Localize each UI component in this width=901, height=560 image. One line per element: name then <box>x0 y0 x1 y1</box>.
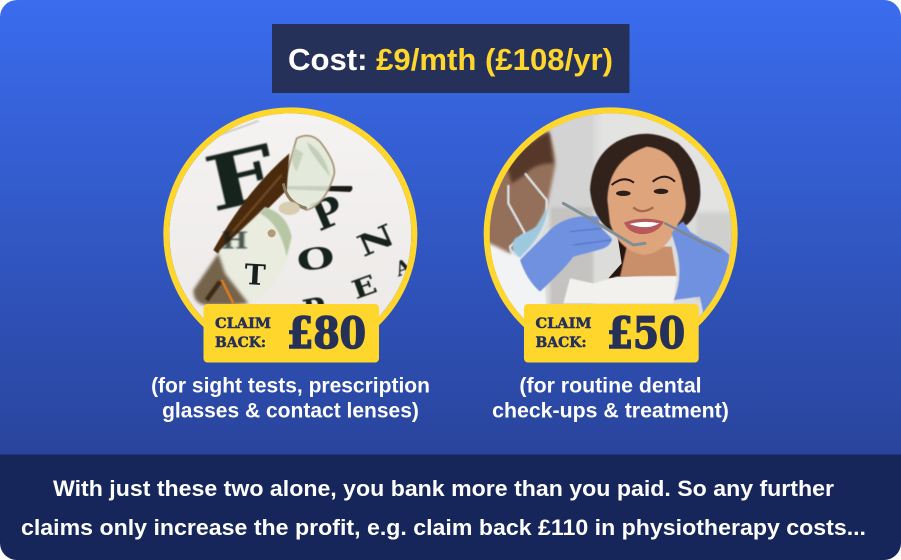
photo: glasses on eye chart: P <box>300 291 329 330</box>
claim badge £50 <box>524 304 699 362</box>
face <box>607 147 686 255</box>
claim badge £50: BACK: <box>536 335 586 351</box>
photo: glasses on eye chart: A <box>391 253 415 282</box>
photo: dentist and patient <box>484 107 738 327</box>
photo: glasses on eye chart: O <box>294 239 337 279</box>
temple arm <box>213 153 289 257</box>
patient hair <box>590 134 700 233</box>
cost heading <box>272 24 630 93</box>
claim badge £80: £80 <box>287 309 366 359</box>
bottom summary bar: With just these two alone, you bank more than you paid. So any further <box>53 476 834 501</box>
claim badge £80: CLAIM <box>215 316 271 332</box>
photo: glasses on eye chart: H <box>222 228 248 255</box>
optical caption: glasses & contact lenses) <box>162 400 419 422</box>
claim badge £50: CLAIM <box>536 316 592 332</box>
optical caption: (for sight tests, prescription <box>151 374 430 398</box>
panel: dental claim <box>483 110 740 422</box>
neck and chest <box>620 247 677 277</box>
dental caption: check-ups & treatment) <box>492 398 729 422</box>
bib <box>563 276 677 303</box>
bottom summary bar <box>0 454 901 560</box>
cost heading: Cost: £9/mth (£108/yr) <box>288 42 613 77</box>
photo: glasses on eye chart: N <box>352 218 400 264</box>
dental caption: (for routine dental <box>519 374 702 398</box>
claim badge £50: £50 <box>607 309 685 359</box>
bottom summary bar: claims only increase the profit, e.g. claim back £110 in physiotherapy costs... <box>21 515 866 540</box>
dentist glove <box>520 216 612 292</box>
left lens <box>215 207 292 303</box>
photo: glasses on eye chart: P <box>305 187 350 241</box>
photo: glasses on eye chart: F <box>198 129 284 229</box>
photo: glasses on eye chart: T <box>244 257 266 292</box>
right lens <box>285 136 334 210</box>
patient-side glove <box>672 222 729 313</box>
photo: glasses on eye chart: E <box>348 269 381 305</box>
dentist head <box>483 132 555 253</box>
photo: glasses on eye chart <box>163 107 418 327</box>
claim badge £80 <box>204 304 379 362</box>
panel: optical claim <box>151 110 430 422</box>
claim badge £80: BACK: <box>215 335 266 351</box>
